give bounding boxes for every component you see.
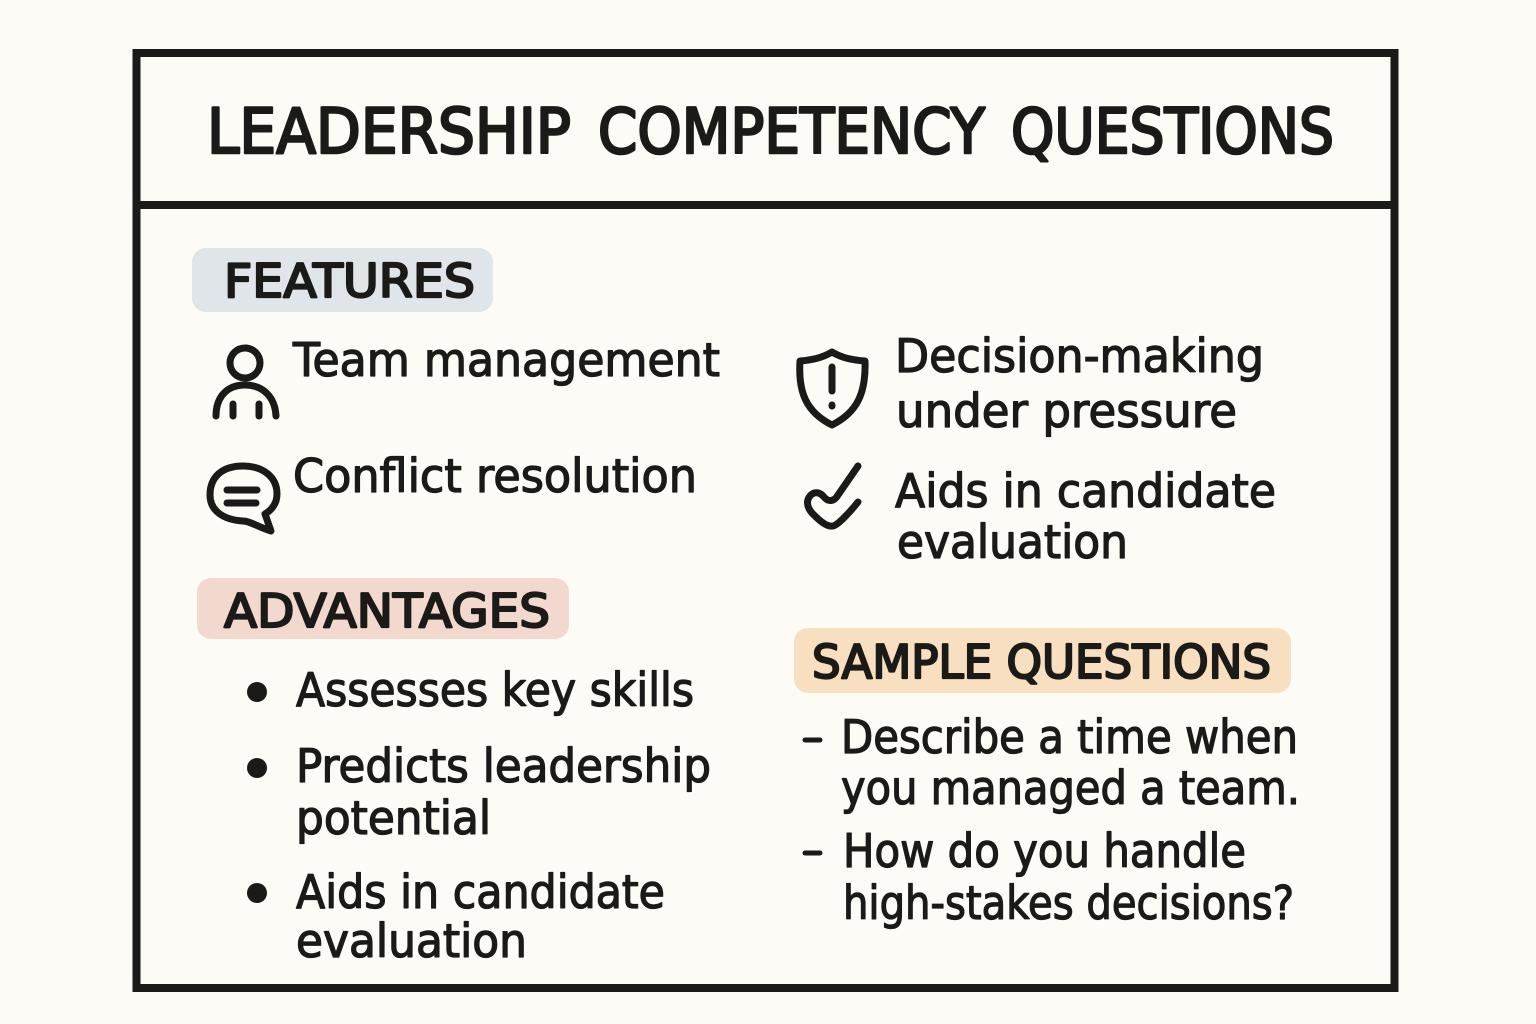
features heading <box>192 248 493 312</box>
feature: decision-making <box>895 329 1264 438</box>
sample questions heading: SAMPLE QUESTIONS <box>812 635 1271 689</box>
sample questions list: How do you handle <box>843 824 1246 878</box>
sample questions list: you managed a team. <box>841 761 1300 815</box>
sample questions list: high-stakes decisions? <box>843 876 1294 930</box>
advantages list <box>247 663 711 968</box>
title <box>207 95 1334 168</box>
sample questions list <box>805 710 1300 930</box>
advantages heading: ADVANTAGES <box>224 584 550 638</box>
feature: candidate evaluation <box>895 464 1276 569</box>
title: LEADERSHIP <box>207 95 571 168</box>
icon: speech bubble <box>210 466 277 531</box>
sample questions list: Describe a time when <box>841 710 1298 764</box>
feature: team management: Team management <box>292 333 720 387</box>
advantages list: evaluation <box>296 914 527 968</box>
feature: candidate evaluation: evaluation <box>897 515 1128 569</box>
icon: person <box>216 348 276 416</box>
advantages list: potential <box>296 791 491 845</box>
feature: decision-making: Decision-making <box>895 329 1264 383</box>
title: COMPETENCY <box>598 95 985 168</box>
icon: shield <box>800 352 865 425</box>
frame panel <box>136 53 1394 988</box>
title divider <box>136 201 1395 209</box>
feature: conflict resolution: Conflict resolution <box>293 449 697 503</box>
advantages list: Aids in candidate <box>296 865 665 919</box>
title: QUESTIONS <box>1011 95 1334 168</box>
icon: check <box>808 466 858 526</box>
advantages list: Predicts leadership <box>296 739 711 793</box>
feature: candidate evaluation: Aids in candidate <box>895 464 1276 518</box>
feature: decision-making: under pressure <box>896 384 1237 438</box>
advantages list: Assesses key skills <box>296 663 694 717</box>
features heading: FEATURES <box>224 254 475 308</box>
